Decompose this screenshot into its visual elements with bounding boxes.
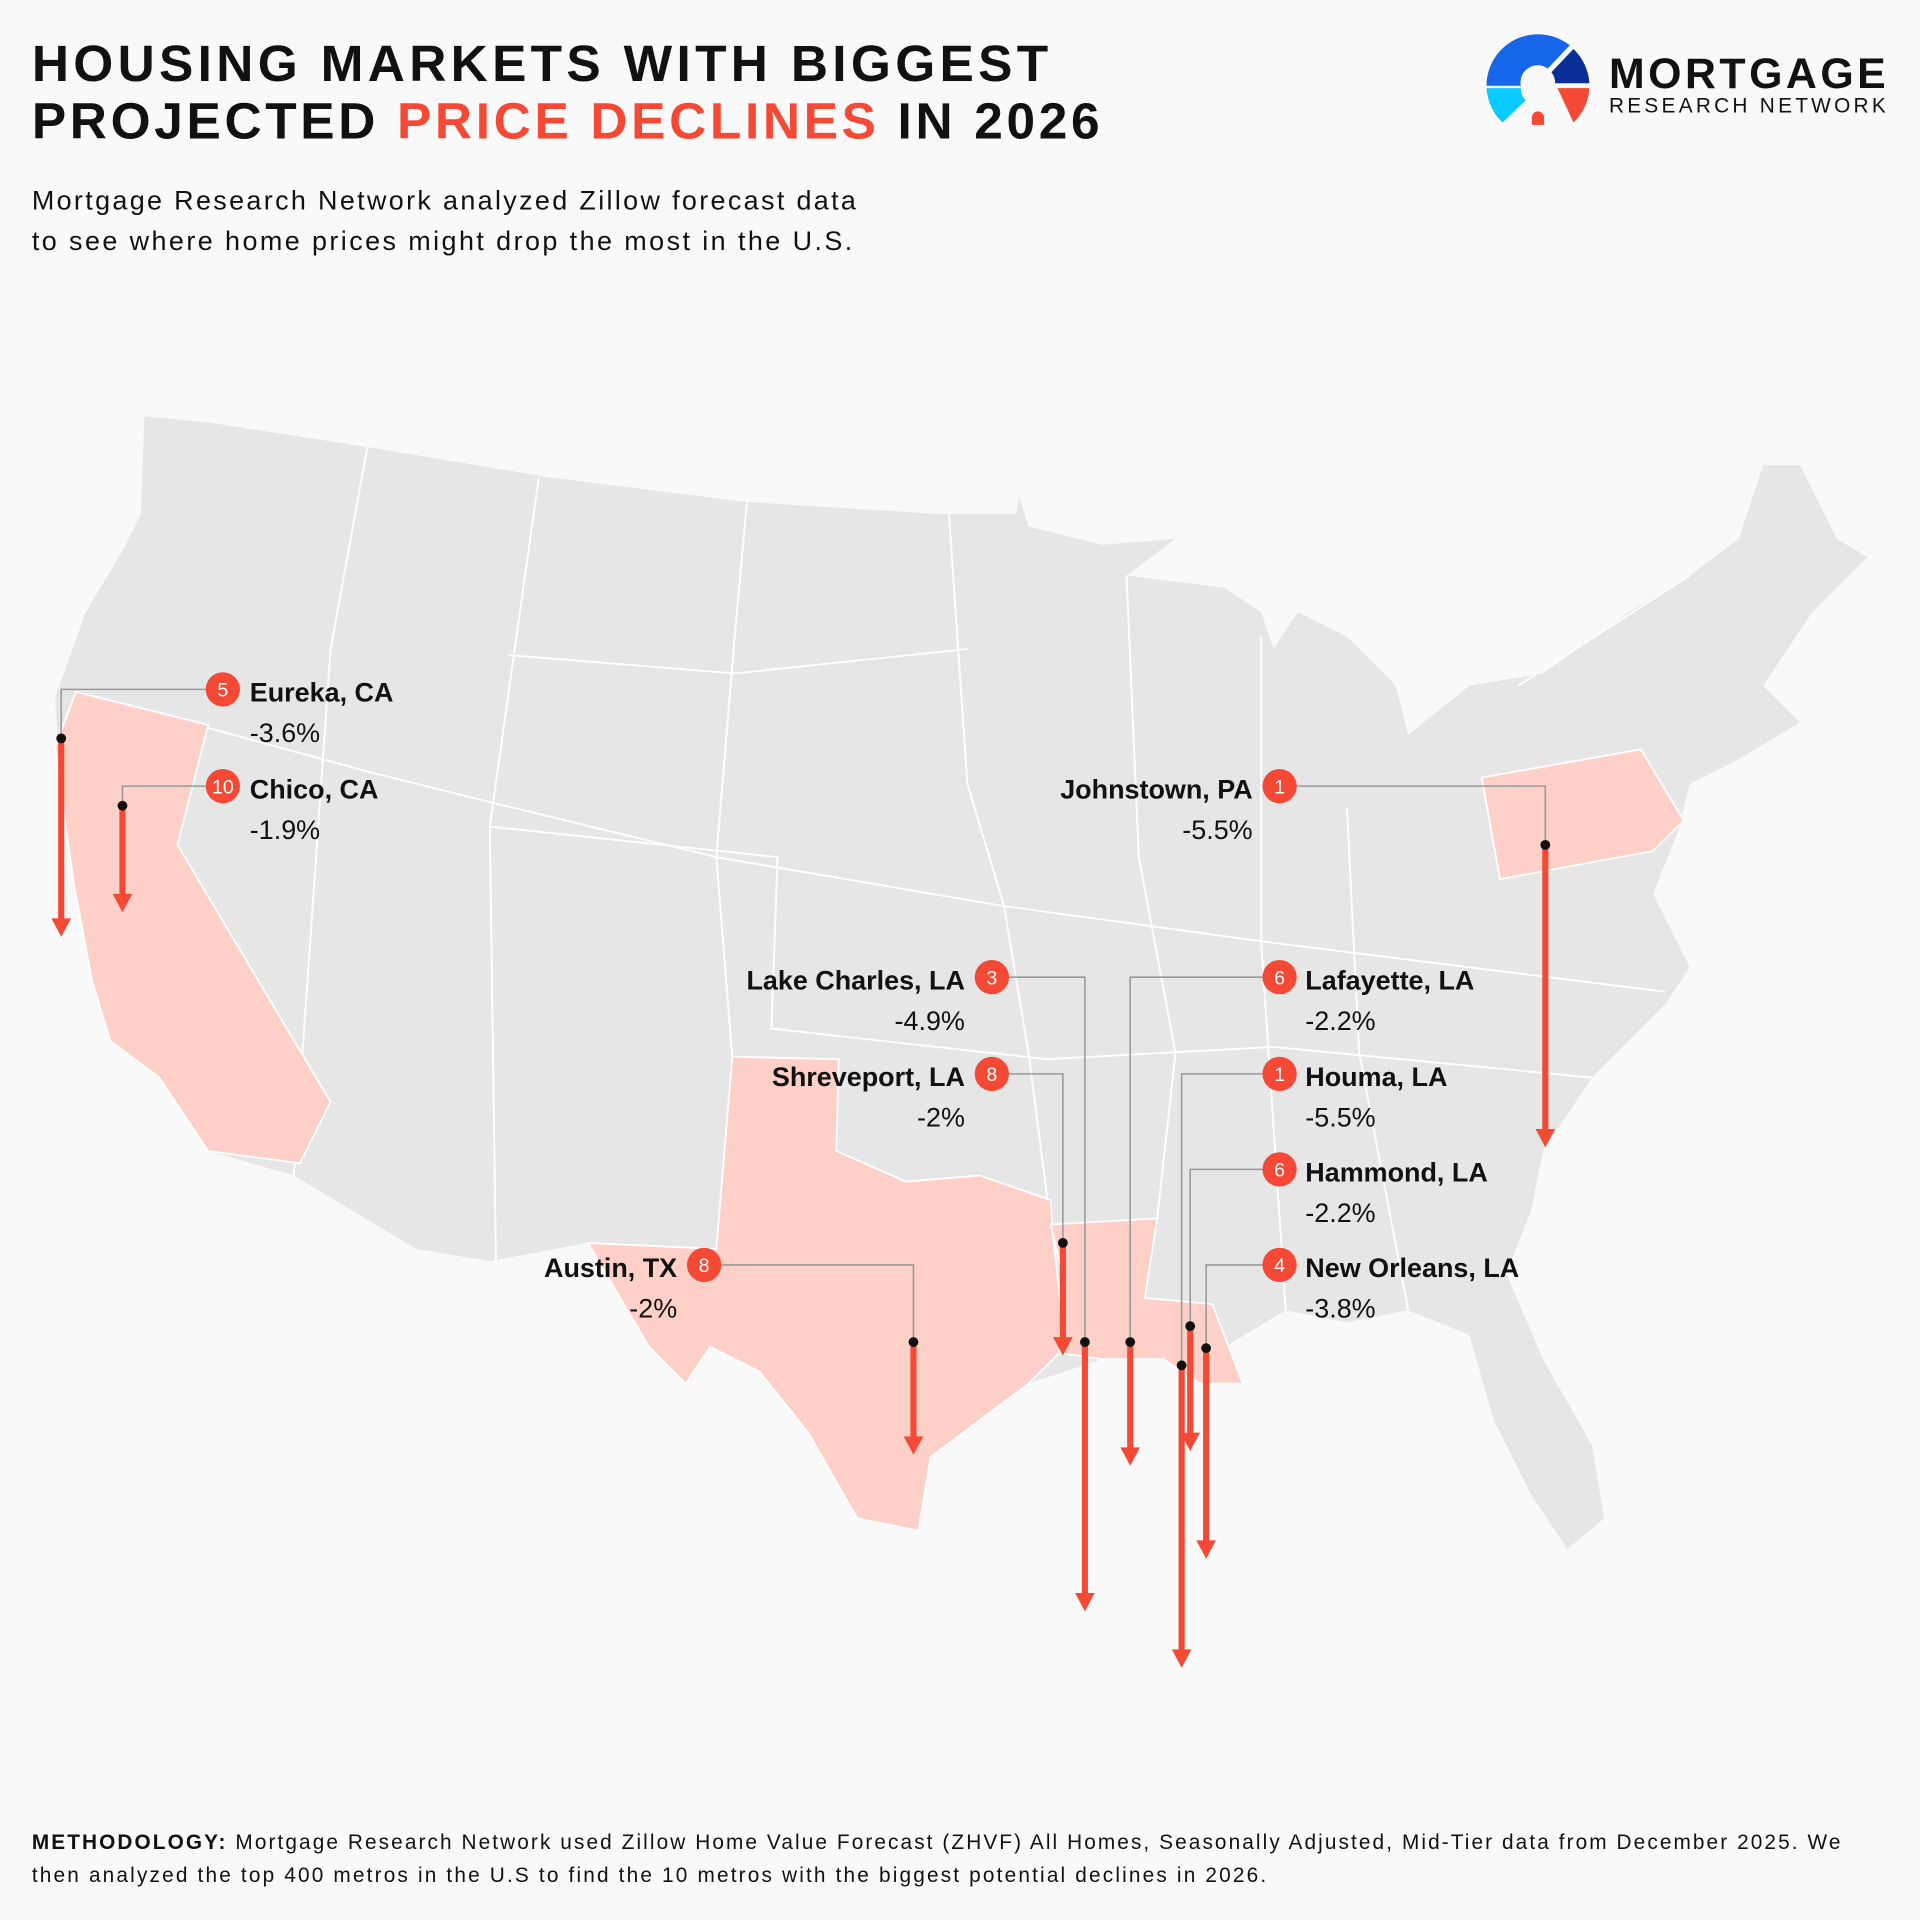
methodology bbox=[32, 1831, 1840, 1887]
text: 1 bbox=[1274, 1064, 1285, 1086]
map: united states bbox=[55, 416, 1867, 1549]
city labels: -3.6% bbox=[250, 718, 320, 748]
text: 1 bbox=[1274, 776, 1285, 798]
decline arrows bbox=[51, 738, 1555, 1668]
text: 6 bbox=[1274, 967, 1285, 989]
city labels: Hammond, LA bbox=[1305, 1158, 1488, 1188]
city labels: Eureka, CA bbox=[250, 678, 393, 708]
logo bbox=[1487, 34, 1886, 125]
city labels: -1.9% bbox=[250, 815, 320, 845]
city labels: Lake Charles, LA bbox=[746, 965, 965, 995]
text: 4 bbox=[1274, 1255, 1285, 1277]
logo: MORTGAGE bbox=[1609, 50, 1886, 98]
city labels: -3.8% bbox=[1305, 1294, 1376, 1324]
methodology: METHODOLOGY: Mortgage Research Network used Zillow Home Value Forecast (ZHVF) All Homes, Seasonally Adjusted, Mid-Tier data from December 2025. We bbox=[32, 1831, 1840, 1854]
rank badges bbox=[206, 672, 1297, 1282]
city labels: New Orleans, LA bbox=[1305, 1253, 1519, 1283]
city labels: -2% bbox=[629, 1294, 677, 1324]
city labels: Chico, CA bbox=[250, 774, 378, 804]
highlighted states bbox=[55, 692, 1684, 1531]
city labels: -2% bbox=[917, 1103, 965, 1133]
text: 6 bbox=[1274, 1160, 1285, 1182]
city labels bbox=[250, 678, 1519, 1324]
city labels: -5.5% bbox=[1305, 1103, 1376, 1133]
subtitle: Mortgage Research Network analyzed Zillow forecast data bbox=[32, 185, 856, 215]
city labels: Austin, TX bbox=[544, 1253, 677, 1283]
city labels: Lafayette, LA bbox=[1305, 965, 1474, 995]
text: 10 bbox=[212, 776, 234, 798]
title: HOUSING MARKETS WITH BIGGEST bbox=[32, 34, 1048, 92]
text: 8 bbox=[986, 1064, 997, 1086]
methodology: then analyzed the top 400 metros in the U.S to find the 10 metros with the biggest potential declines in 2026. bbox=[32, 1864, 1266, 1887]
city labels: -5.5% bbox=[1182, 815, 1253, 845]
title: PROJECTED PRICE DECLINES IN 2026 bbox=[32, 91, 1100, 149]
text: 5 bbox=[217, 680, 228, 702]
leader lines bbox=[61, 689, 1545, 1365]
text: 8 bbox=[699, 1255, 710, 1277]
location dots bbox=[56, 733, 1550, 1370]
title bbox=[32, 34, 1100, 149]
city labels: Johnstown, PA bbox=[1060, 774, 1253, 804]
city labels: -2.2% bbox=[1305, 1198, 1376, 1228]
city labels: Houma, LA bbox=[1305, 1062, 1447, 1092]
subtitle: to see where home prices might drop the most in the U.S. bbox=[32, 226, 852, 256]
city labels: -4.9% bbox=[895, 1006, 965, 1036]
text: 3 bbox=[986, 967, 997, 989]
subtitle bbox=[32, 185, 856, 256]
city labels: -2.2% bbox=[1305, 1006, 1376, 1036]
logo: RESEARCH NETWORK bbox=[1609, 95, 1886, 118]
city labels: Shreveport, LA bbox=[772, 1062, 965, 1092]
